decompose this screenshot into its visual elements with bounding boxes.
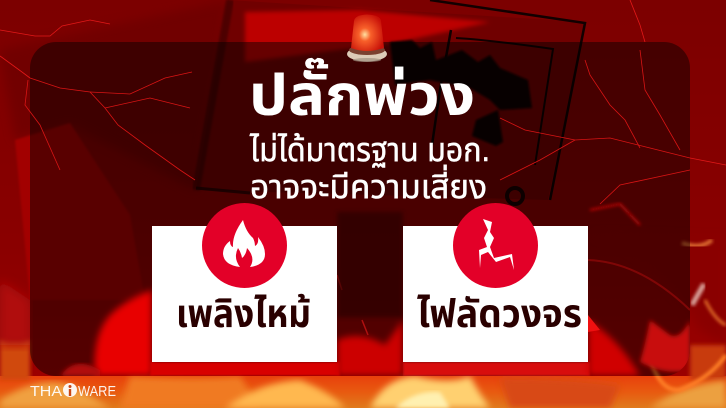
card: short circuit bbox=[403, 203, 588, 362]
lightning inner bbox=[25, 50, 690, 204]
icon: red siren bbox=[347, 14, 387, 62]
card: fire bbox=[152, 203, 337, 362]
icon: electric crack badge bbox=[453, 203, 538, 288]
title: ปลั๊กพ่วง bbox=[249, 57, 475, 128]
icon: flame badge bbox=[202, 203, 287, 288]
label: เพลิงไหม้ bbox=[176, 293, 311, 336]
logo: Thaiware: THA bbox=[30, 384, 62, 400]
photo: damaged wall plate bbox=[196, 0, 585, 204]
dark overlay panel bbox=[30, 42, 690, 376]
logo: Thaiware: WARE bbox=[78, 384, 116, 400]
center dark column bbox=[337, 212, 403, 317]
flames inside panel bbox=[60, 204, 690, 376]
subtitle: ไม่ได้มาตรฐาน มอก. bbox=[249, 131, 490, 168]
logo: Thaiware bbox=[30, 383, 116, 400]
lightning outer bbox=[0, 0, 726, 165]
flames: bottom band bbox=[0, 240, 726, 408]
subtitle bbox=[249, 131, 490, 205]
subtitle: อาจจะมีความเสี่ยง bbox=[250, 164, 487, 205]
label: ไฟลัดวงจร bbox=[417, 293, 582, 336]
